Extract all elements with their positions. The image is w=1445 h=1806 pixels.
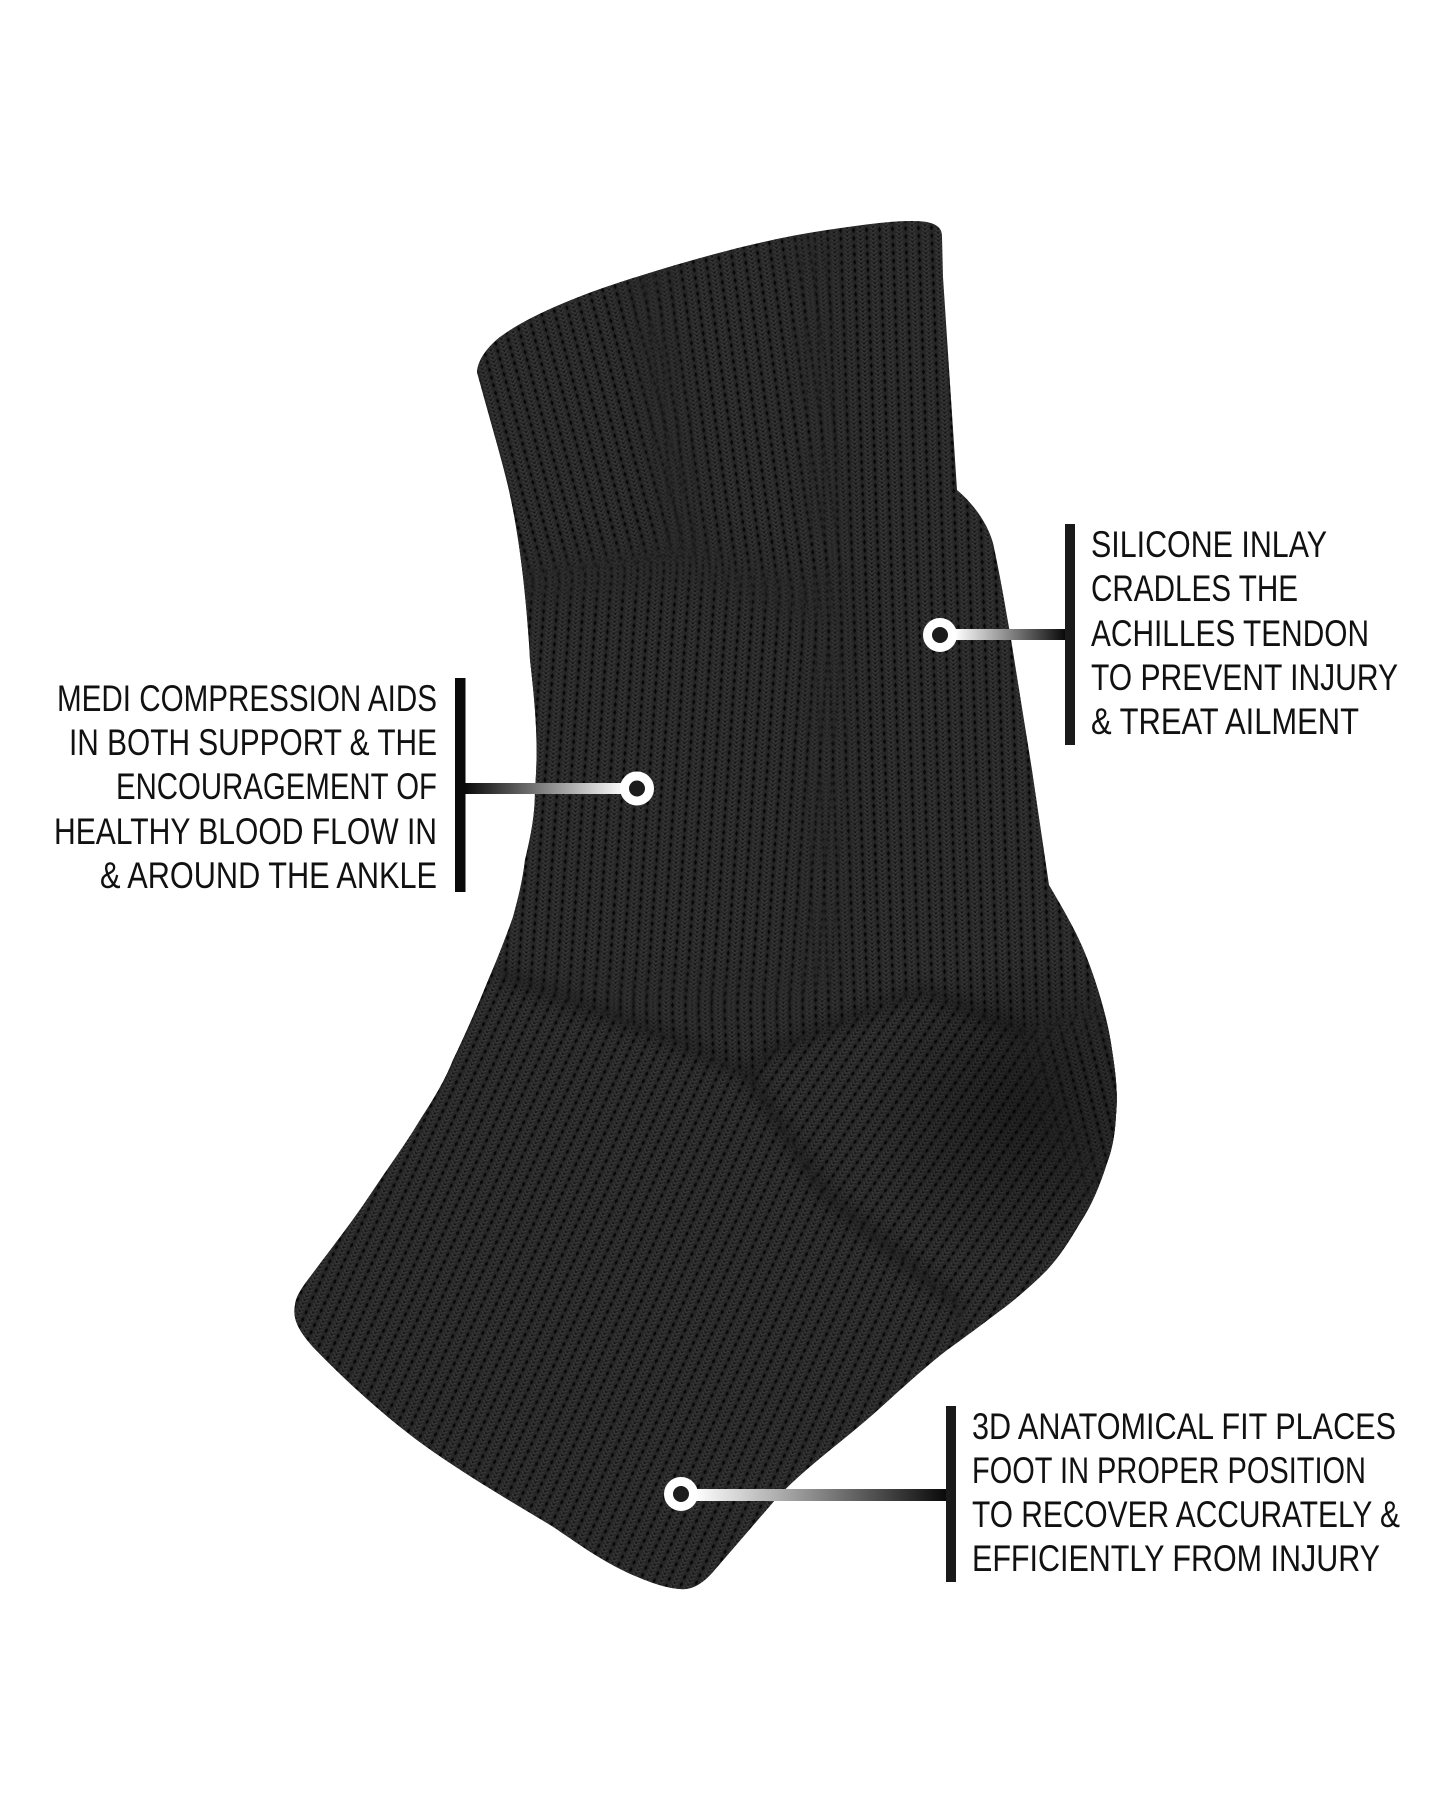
text block bbox=[1091, 524, 1398, 742]
text block: HEALTHY BLOOD FLOW IN bbox=[54, 811, 437, 852]
text block: & AROUND THE ANKLE bbox=[100, 855, 437, 896]
text block: ENCOURAGEMENT OF bbox=[116, 766, 437, 807]
connector line bbox=[694, 1489, 946, 1501]
callout: silicone inlay bbox=[928, 524, 1398, 745]
heel shading bbox=[936, 1032, 1104, 1194]
text block bbox=[972, 1406, 1400, 1579]
seam shadows bbox=[743, 1067, 757, 1076]
text block: & TREAT AILMENT bbox=[1091, 701, 1359, 742]
text block bbox=[54, 678, 437, 896]
text block: IN BOTH SUPPORT & THE bbox=[69, 722, 437, 763]
marker dot bbox=[624, 776, 650, 801]
vertical bar bbox=[455, 678, 466, 892]
vertical bar bbox=[946, 1406, 956, 1582]
text block: SILICONE INLAY bbox=[1091, 524, 1327, 565]
text block: CRADLES THE bbox=[1091, 568, 1298, 609]
callout: 3D anatomical fit bbox=[668, 1406, 1400, 1582]
text block: MEDI COMPRESSION AIDS bbox=[57, 678, 437, 719]
ankle sleeve product bbox=[280, 210, 1140, 1600]
vertical bar bbox=[1065, 524, 1075, 745]
connector line bbox=[465, 783, 625, 794]
text block: ACHILLES TENDON bbox=[1091, 613, 1369, 654]
marker dot bbox=[928, 622, 952, 648]
connector line bbox=[955, 629, 1065, 640]
marker dot bbox=[668, 1482, 694, 1506]
callout: medi compression bbox=[54, 678, 650, 896]
